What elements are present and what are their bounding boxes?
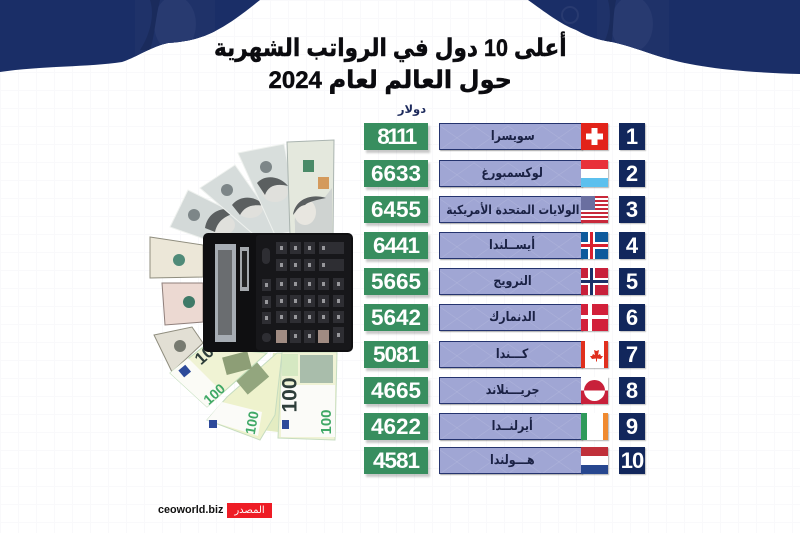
rank 2: 2	[626, 160, 638, 186]
value 9: 4622	[371, 414, 421, 438]
country name 8	[439, 377, 582, 404]
flag: Iceland	[581, 232, 608, 258]
euro banknotes	[170, 342, 337, 440]
flag: Norway	[581, 268, 608, 295]
flag: Switzerland	[581, 123, 608, 150]
value 5: 5665	[371, 269, 421, 294]
row 1: Switzerland	[364, 123, 646, 154]
rank 7	[619, 340, 645, 368]
euro banknotes: 10	[191, 342, 218, 369]
value 10	[364, 447, 428, 474]
euro banknotes: 100	[318, 409, 335, 435]
country name 10: هـــولندا	[490, 453, 535, 468]
row 7: Canada	[364, 341, 646, 372]
country name 3: الولايات المتحدة الأمريكية	[447, 202, 580, 216]
value 6: 5642	[371, 305, 421, 330]
source label: المصدر	[234, 505, 265, 516]
header background shape with banknote portraits	[0, 0, 800, 74]
row 9: Ireland	[364, 413, 646, 444]
calculator	[203, 233, 353, 352]
title	[214, 31, 566, 94]
rank 5: 5	[626, 269, 638, 294]
title: أعلى 10 دول في الرواتب الشهرية	[214, 35, 566, 62]
rank 1	[619, 123, 645, 150]
flag: Greenland	[581, 377, 608, 404]
value 7: 5081	[373, 342, 419, 366]
rank 3: 3	[626, 196, 638, 222]
country name 4	[439, 232, 582, 258]
flag: Netherlands	[581, 447, 608, 474]
country name 4: أيســلندا	[490, 238, 535, 252]
value 8: 4665	[371, 378, 421, 403]
flag: Denmark	[581, 304, 608, 331]
country name 3	[439, 196, 582, 222]
rank 3	[619, 196, 645, 222]
country name 1	[439, 123, 582, 150]
country name 2	[439, 160, 582, 186]
row 8: Greenland	[364, 377, 646, 408]
country name 7	[439, 340, 582, 368]
value 4: 6441	[373, 232, 419, 258]
flag: Canada	[581, 340, 608, 368]
rank 6: 6	[626, 305, 638, 330]
value 4	[364, 232, 428, 258]
country name 8: جريـــنلاند	[486, 383, 539, 398]
rank 4	[619, 232, 645, 258]
source label	[227, 503, 272, 518]
US dollar bills fan	[170, 140, 334, 240]
rank 7: 7	[626, 342, 638, 366]
value 7	[364, 340, 428, 368]
source website: ceoworld.biz	[158, 504, 223, 516]
value 2: 6633	[371, 160, 421, 186]
euro banknotes: 100	[242, 410, 262, 436]
country name 9	[439, 412, 582, 440]
euro banknotes: 100	[279, 377, 302, 413]
value 1: 8111	[377, 124, 415, 149]
row 10: Netherlands	[364, 447, 646, 478]
rank 1: 1	[626, 124, 638, 149]
country name 7: كـــندا	[496, 346, 529, 362]
row 6: Denmark	[364, 304, 646, 335]
left banknotes	[150, 237, 203, 372]
euro banknotes: 100	[200, 380, 228, 408]
row 4: Iceland	[364, 232, 646, 263]
country name 6	[439, 304, 582, 331]
rank 2	[619, 160, 645, 186]
rank 4: 4	[626, 232, 638, 258]
rank 10: 10	[621, 448, 643, 473]
rank 9: 9	[626, 414, 638, 438]
rank 8	[619, 377, 645, 404]
title: حول العالم لعام 2024	[268, 67, 512, 94]
unit label: dollars: دولار	[398, 102, 426, 116]
country name 10	[439, 447, 582, 474]
country name 1: سويسرا	[491, 129, 534, 144]
country name 2: لوكسمبورغ	[482, 166, 543, 180]
value 3: 6455	[371, 196, 421, 222]
row 5: Norway	[364, 268, 646, 299]
rank 9	[619, 412, 645, 440]
country name 5: النرويج	[493, 274, 532, 289]
rank 6	[619, 304, 645, 331]
country name 6: الدنمارك	[489, 310, 536, 325]
flag: United States	[581, 196, 608, 222]
value 10: 4581	[373, 448, 419, 473]
value 1	[364, 123, 428, 150]
flag: Luxembourg	[581, 160, 608, 186]
rank 8: 8	[626, 378, 638, 403]
country name 9: أيرلنــدا	[492, 418, 533, 434]
rank 5	[619, 268, 645, 295]
row 2: Luxembourg	[364, 160, 646, 191]
flag: Ireland	[581, 412, 608, 440]
row 3: United States	[364, 196, 646, 227]
country name 5	[439, 268, 582, 295]
